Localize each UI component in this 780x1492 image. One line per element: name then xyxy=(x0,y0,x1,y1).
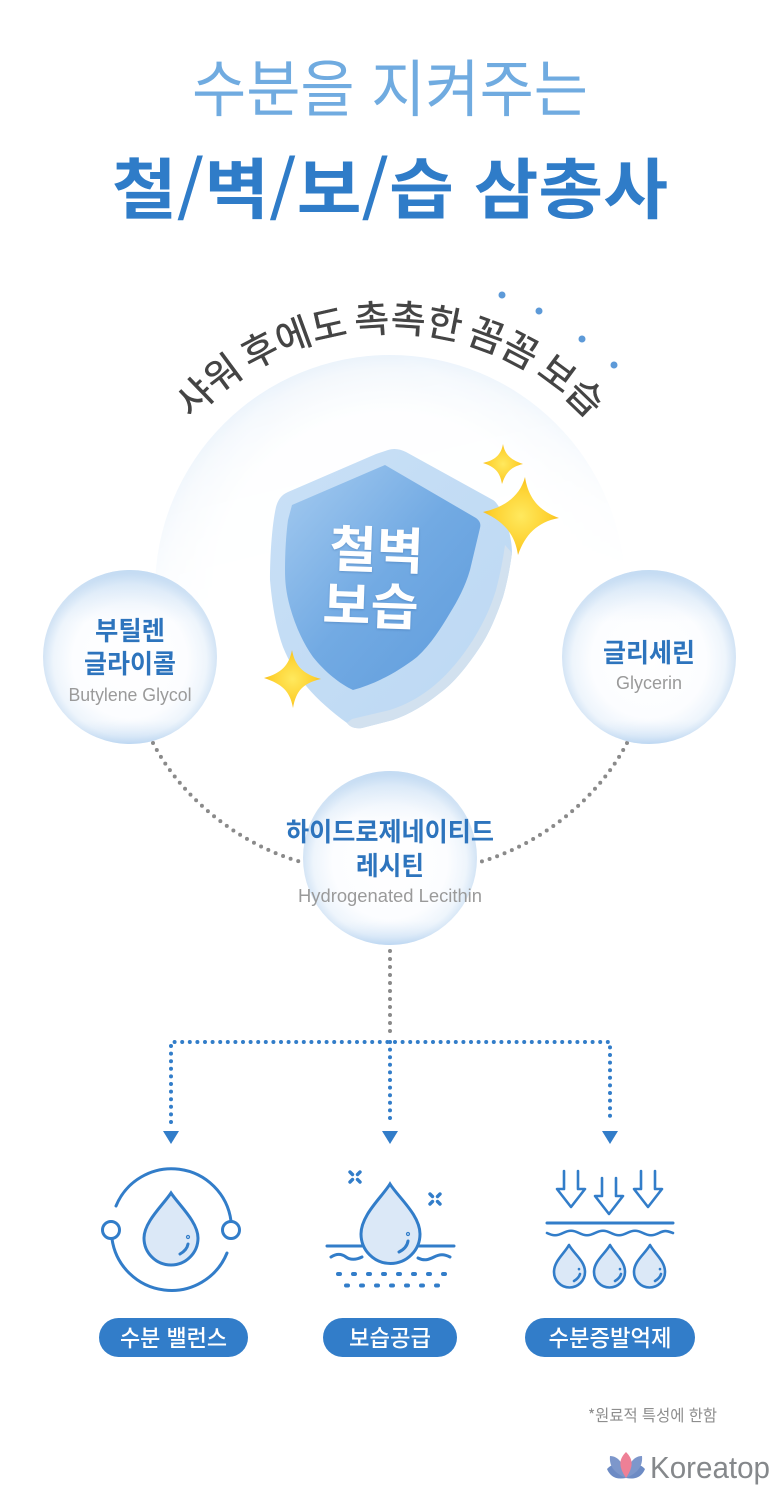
bubble: hydrogenated lecithin: Hydrogenated Lecithin xyxy=(298,886,482,906)
large background bubble xyxy=(160,355,575,545)
logo: Koreatop xyxy=(650,1450,770,1485)
footnote: *원료적 특성에 한함 xyxy=(588,1402,717,1426)
icon: moisture balance xyxy=(102,1169,240,1290)
bubble: butylene glycol: 부틸렌 xyxy=(95,611,165,648)
bubble: hydrogenated lecithin: 레시틴 xyxy=(356,846,424,883)
shield text xyxy=(322,509,425,641)
pill: evaporation control: 수분증발억제 xyxy=(548,1319,672,1353)
pill: moisture balance: 수분 밸런스 xyxy=(120,1319,227,1353)
title line 1: 수분을 지켜주는 xyxy=(192,39,588,129)
bubble: butylene glycol: 글라이콜 xyxy=(84,644,176,681)
pill: evaporation control xyxy=(525,1318,695,1357)
connector: left dotted curve xyxy=(153,743,301,862)
connector: blue branching dots xyxy=(171,1042,610,1122)
shield text: 철벽 xyxy=(329,509,425,585)
arrowheads xyxy=(163,1131,618,1144)
connector: right dotted curve xyxy=(480,743,627,862)
pill: moisture balance xyxy=(99,1318,248,1357)
title line 2: 철/벽/보/습 삼총사 xyxy=(112,137,668,233)
bubble: butylene glycol xyxy=(43,570,217,744)
water dots xyxy=(498,292,618,368)
bubble: glycerin: Glycerin xyxy=(616,673,682,693)
pill: moisture supply xyxy=(323,1318,457,1357)
curved heading: 샤워 후에도 촉촉한 꼼꼼 보습 xyxy=(178,300,601,418)
icon: moisture supply xyxy=(327,1172,454,1286)
icon: evaporation control xyxy=(547,1171,673,1288)
bubble: glycerin xyxy=(562,570,736,744)
bubble: hydrogenated lecithin: 하이드로제네이티드 xyxy=(286,812,494,849)
connector: grey vertical dots xyxy=(388,951,392,1036)
shield text: 보습 xyxy=(322,565,420,641)
bubble: butylene glycol: Butylene Glycol xyxy=(68,685,192,705)
pill: moisture supply: 보습공급 xyxy=(349,1319,431,1353)
bubble: hydrogenated lecithin xyxy=(286,771,494,945)
bubble: glycerin: 글리세린 xyxy=(603,633,695,670)
shield xyxy=(270,449,512,728)
sparkles xyxy=(264,444,559,708)
